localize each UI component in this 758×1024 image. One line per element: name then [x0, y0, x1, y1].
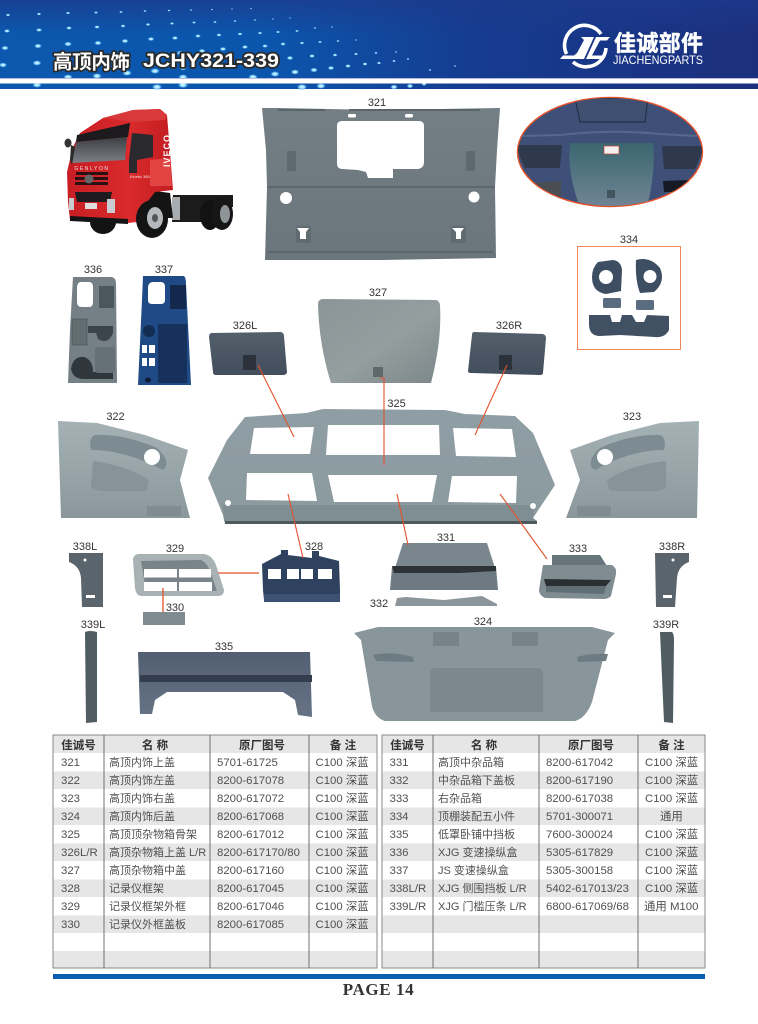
right table header: 原厂图号 — [568, 739, 614, 752]
part 338L — [69, 541, 103, 607]
part 338R — [655, 541, 689, 607]
table rows: 8200-617078 — [217, 775, 284, 787]
logo mark: JC ring — [560, 25, 610, 67]
table rows: 8200-617160 — [217, 865, 284, 877]
right table rows: C100 深蓝 — [645, 881, 698, 895]
right table rows: C100 深蓝 — [645, 845, 698, 859]
right table rows: C100 深蓝 — [645, 791, 698, 805]
right table rows: XJG 侧围挡板 L/R — [438, 881, 527, 895]
right table rows: 8200-617190 — [546, 775, 613, 787]
part 329: 329 — [166, 543, 184, 555]
table rows: 记录仪框架外框 — [109, 900, 186, 913]
part 331: 331 — [437, 532, 455, 544]
part 330: 330 — [166, 602, 184, 614]
truck photo — [64, 109, 233, 238]
table rows — [61, 755, 369, 931]
table rows: 高顶顶杂物箱骨架 — [109, 827, 197, 841]
right table rows: 顶棚装配五小件 — [438, 809, 515, 823]
logo text: 佳诚部件 — [614, 31, 703, 56]
right table header: 佳诚号 — [390, 738, 425, 752]
right table rows: 333 — [390, 793, 409, 805]
part 323: 323 — [623, 411, 641, 423]
panel: part 334 small parts box: 334 — [620, 234, 638, 246]
right table header — [390, 738, 685, 752]
right table rows: XJG 门槛压条 L/R — [438, 899, 527, 913]
part 326R: 326R — [496, 320, 522, 332]
part 333: 333 — [569, 543, 587, 555]
logo text — [613, 31, 703, 67]
right table rows: 通用 M100 — [644, 900, 698, 913]
table rows: 326L/R — [61, 847, 98, 859]
table rows: 8200-617068 — [217, 811, 284, 823]
table rows: 5701-61725 — [217, 757, 278, 769]
part 332 — [370, 596, 497, 610]
table rows: C100 深蓝 — [316, 899, 369, 913]
part 324: 324 — [474, 616, 492, 628]
table rows: C100 深蓝 — [316, 917, 369, 931]
table header: 备 注 — [330, 738, 357, 752]
table rows: 8200-617072 — [217, 793, 284, 805]
right table rows: 8200-617042 — [546, 757, 613, 769]
title: 高顶内饰 — [53, 50, 130, 74]
right table rows: 5701-300071 — [546, 811, 613, 823]
detail photo: installed console ellipse — [515, 98, 705, 206]
right table header: 备 注 — [658, 738, 685, 752]
table header: 原厂图号 — [239, 739, 285, 752]
right table rows: 339L/R — [390, 901, 426, 913]
right table rows: C100 深蓝 — [645, 773, 698, 787]
table header — [61, 738, 357, 752]
header banner — [0, 0, 758, 90]
table: right parts list — [382, 735, 705, 968]
truck photo: GENLYON — [74, 166, 110, 172]
table rows: 记录仪框架 — [109, 882, 164, 895]
table rows: C100 深蓝 — [316, 755, 369, 769]
table: left parts list — [53, 735, 377, 968]
logo — [560, 25, 703, 67]
right table rows: 5305-617829 — [546, 847, 613, 859]
part 338L: 338L — [73, 541, 97, 553]
right table rows: C100 深蓝 — [645, 827, 698, 841]
table rows: C100 深蓝 — [316, 827, 369, 841]
table rows: 327 — [61, 865, 80, 877]
part 321: roof upper cover — [262, 97, 500, 260]
table rows: 330 — [61, 919, 80, 931]
panel: part 334 small parts box — [578, 234, 680, 350]
table rows: C100 深蓝 — [316, 773, 369, 787]
part 331 — [390, 532, 498, 590]
part 322: 322 — [106, 411, 125, 423]
table rows: 高顶内饰左盖 — [109, 773, 175, 787]
table header: 名 称 — [142, 738, 169, 752]
right table rows: 334 — [390, 811, 409, 823]
right table rows: XJG 变速操纵盒 — [438, 845, 517, 859]
part 326L — [209, 320, 287, 375]
table rows: 324 — [61, 811, 80, 823]
part 326R — [468, 320, 546, 375]
part 338R: 338R — [659, 541, 685, 553]
right table rows: C100 深蓝 — [645, 863, 698, 877]
table rows: 高顶杂物箱中盖 — [109, 863, 186, 877]
table rows: C100 深蓝 — [316, 791, 369, 805]
right table rows: 低罩卧铺中挡板 — [438, 827, 515, 841]
table rows: C100 深蓝 — [316, 809, 369, 823]
part 335: 335 — [215, 641, 233, 653]
part 321: roof upper cover: 321 — [368, 97, 386, 109]
part 328: 328 — [305, 541, 323, 553]
part 325: roof console frame: 325 — [387, 398, 406, 410]
right table header: 名 称 — [471, 738, 498, 752]
leader lines — [163, 365, 547, 612]
right table rows: 331 — [390, 757, 409, 769]
table rows: 325 — [61, 829, 80, 841]
part 337: JS gear box — [138, 264, 191, 385]
part 339L: 339L — [81, 619, 105, 631]
table rows: 322 — [61, 775, 80, 787]
part 325: roof console frame — [208, 398, 555, 524]
part 329 — [133, 543, 224, 596]
part 323 — [566, 411, 699, 518]
table rows: 8200-617085 — [217, 919, 284, 931]
right table rows: 332 — [390, 775, 409, 787]
right table rows: 336 — [390, 847, 409, 859]
part 339R — [653, 619, 679, 723]
part 326L: 326L — [233, 320, 257, 332]
right table rows: 右杂品箱 — [438, 791, 482, 805]
logo text: JIACHENGPARTS — [613, 53, 703, 67]
part 322 — [58, 411, 190, 518]
right table rows: 中杂品箱下盖板 — [438, 773, 515, 787]
right table rows: 8200-617038 — [546, 793, 613, 805]
table rows: 329 — [61, 901, 80, 913]
table rows: C100 深蓝 — [316, 863, 369, 877]
right table rows: 高顶中杂品箱 — [438, 755, 504, 769]
right table rows: 5305-300158 — [546, 865, 613, 877]
table rows: 高顶杂物箱上盖 L/R — [109, 845, 206, 859]
right table rows: 5402-617013/23 — [546, 883, 629, 895]
part 339L — [81, 619, 105, 723]
part 333 — [539, 543, 616, 599]
table rows: C100 深蓝 — [316, 845, 369, 859]
title: JCHY321-339 — [143, 51, 279, 72]
part 336: XJG gear box — [68, 264, 117, 383]
part 337: JS gear box: 337 — [155, 264, 173, 276]
table header: 佳诚号 — [61, 738, 96, 752]
right table rows: 6800-617069/68 — [546, 901, 629, 913]
part 339R: 339R — [653, 619, 679, 631]
table rows: 记录仪外框盖板 — [109, 917, 186, 931]
table rows: 8200-617012 — [217, 829, 284, 841]
right table rows: 338L/R — [390, 883, 426, 895]
part 335 — [138, 641, 312, 717]
table rows: 高顶内饰右盖 — [109, 791, 175, 805]
part 328 — [262, 541, 340, 602]
table rows: 8200-617046 — [217, 901, 284, 913]
part 332: 332 — [370, 598, 388, 610]
table rows: 8200-617170/80 — [217, 847, 300, 859]
part 324 — [354, 616, 615, 721]
truck photo: Kinetic 380 — [130, 174, 151, 179]
right table rows — [390, 755, 698, 913]
table rows: 高顶内饰上盖 — [109, 755, 175, 769]
table rows: 321 — [61, 757, 80, 769]
right table rows: 335 — [390, 829, 409, 841]
part 336: XJG gear box: 336 — [84, 264, 102, 276]
right table rows: 通用 — [660, 810, 683, 823]
table rows: 323 — [61, 793, 80, 805]
right table rows: 337 — [390, 865, 409, 877]
table rows: 高顶内饰后盖 — [109, 809, 175, 823]
right table rows: C100 深蓝 — [645, 755, 698, 769]
title — [53, 50, 279, 74]
page number: PAGE 14 — [343, 980, 414, 999]
table rows: C100 深蓝 — [316, 881, 369, 895]
part 327 — [318, 287, 440, 383]
part 327: 327 — [369, 287, 387, 299]
footer bar — [53, 974, 705, 979]
table rows: 328 — [61, 883, 80, 895]
table rows: 8200-617045 — [217, 883, 284, 895]
truck photo: IVECO — [162, 135, 172, 167]
part 330 — [143, 602, 185, 625]
right table rows: 7600-300024 — [546, 829, 613, 841]
right table rows: JS 变速操纵盒 — [438, 863, 509, 877]
